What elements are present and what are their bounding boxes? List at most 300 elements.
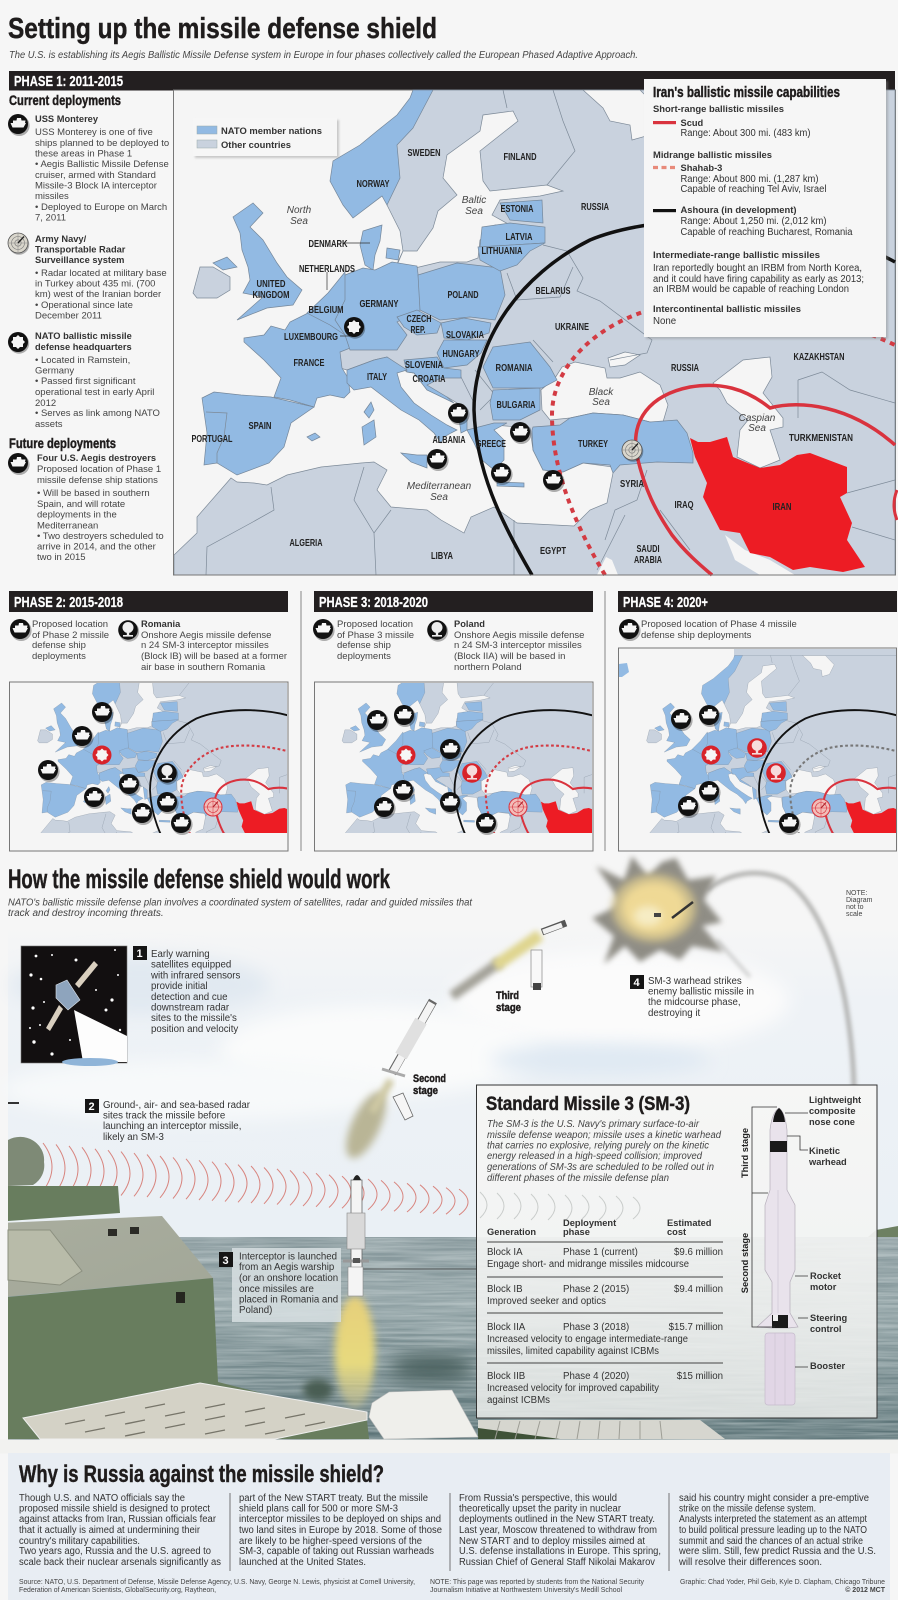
illustration: missile defense scene <box>0 856 898 1454</box>
label: second stage: Second stage <box>740 1233 750 1293</box>
column 2: interceptor missiles to be deployed on ships and <box>239 1514 441 1525</box>
label: second stage: stage <box>413 1085 438 1097</box>
icon: radar <box>8 233 29 255</box>
column 3: From Russia's perspective, this would <box>459 1493 617 1504</box>
panel: why is Russia against <box>8 1453 890 1600</box>
text: Aegis destroyers <box>37 453 164 563</box>
label: third stage: Third stage <box>740 1128 750 1178</box>
country labels: CROATIA <box>412 373 446 385</box>
text: Poland: n 24 SM-3 interceptor missiles <box>454 640 582 651</box>
country labels: BELGIUM <box>308 304 344 316</box>
graphic credit: Graphic: Chad Yoder, Phil Geib, Kyle D. Clapham, Chicago Tribune <box>680 1579 885 1586</box>
subheading: track and destroy incoming threats. <box>8 908 164 919</box>
panel: Iran's missile capabilities: Intermediate-range ballistic missiles <box>653 250 820 260</box>
reporting note: Journalism Initiative at Northwestern University's Medill School <box>430 1587 622 1594</box>
country labels: EGYPT <box>540 545 566 557</box>
sea labels: North <box>287 205 312 216</box>
warship <box>8 1137 725 1439</box>
text: USS Monterey: missiles <box>35 191 69 202</box>
icon: ship <box>8 114 30 136</box>
text: Poland: northern Poland <box>454 662 522 673</box>
part labels: composite <box>809 1106 856 1116</box>
launch plume <box>303 1296 474 1408</box>
legend: Ashoura <box>653 205 853 238</box>
text: USS Monterey: • Aegis Ballistic Missile Defense <box>35 159 169 170</box>
part labels <box>808 1095 861 1371</box>
step 1: with infrared sensors <box>150 970 241 981</box>
text: NATO headquarters: • Located in Ramstein, <box>35 355 130 366</box>
panel: current deployments <box>8 92 169 430</box>
country labels: TURKMENISTAN <box>789 432 853 444</box>
sea labels: Sea <box>592 397 610 408</box>
text: radar system <box>35 234 167 322</box>
column 3: New START and to deploy missiles aimed at <box>459 1536 645 1547</box>
phase 3 header bar: PHASE 3: 2018-2020 <box>319 594 428 611</box>
country labels: BELARUS <box>536 285 570 297</box>
map: phase 3 <box>314 656 623 859</box>
country labels: UNITED <box>256 278 286 290</box>
legend: Scud <box>653 118 810 139</box>
text: Aegis destroyers: arrive in 2014, and the other <box>37 542 156 552</box>
text: Poland <box>454 619 584 673</box>
text: NATO headquarters: Germany <box>35 366 74 376</box>
text: Poland: Poland <box>454 619 485 629</box>
icon: headquarters <box>8 332 29 354</box>
radar waves <box>43 1143 468 1215</box>
text: Romania: (Block IB) will be based at a former <box>141 651 287 662</box>
text: radar system: in Turkey about 435 mi. (700 <box>35 278 155 290</box>
panel: future deployments <box>8 435 164 563</box>
text: Poland: Onshore Aegis missile defense <box>454 630 584 641</box>
text: USS Monterey: USS Monterey <box>35 114 99 124</box>
legend: Shahab-3: Range: About 800 mi. (1,287 km) <box>680 174 818 185</box>
title: Setting up the missile defense shield <box>8 13 437 45</box>
country labels: ESTONIA <box>500 203 534 215</box>
step 3: placed in Romania and <box>239 1295 338 1306</box>
panel: Standard Missile 3 <box>476 1085 877 1418</box>
phase 2 header bar <box>9 591 288 612</box>
country labels: SYRIA <box>620 478 644 490</box>
description: energy released in a high-speed collision; improved <box>487 1151 702 1162</box>
panel: phase 2 <box>9 591 318 859</box>
text: Aegis destroyers: • Two destroyers scheduled to <box>37 531 164 542</box>
icon: onshore missile site <box>427 620 448 642</box>
step 1 <box>133 946 241 1035</box>
sea labels: Sea <box>430 492 448 503</box>
column 2: shield plans call for 500 or more SM-3 <box>239 1504 398 1515</box>
step 1: Early warning <box>151 949 210 960</box>
step 3: once missiles are <box>239 1284 314 1295</box>
sea labels: Mediterranean <box>407 481 472 492</box>
column 1: proposed missile shield is designed to protect <box>19 1504 210 1515</box>
step 3: 3 <box>222 1255 229 1267</box>
part labels: Rocket <box>810 1271 841 1281</box>
column 3: Last year, Moscow threatened to withdraw from <box>459 1525 657 1536</box>
part labels: Lightweight <box>809 1095 861 1105</box>
text: Aegis destroyers: Mediterranean <box>37 520 98 532</box>
text: Aegis destroyers: two in 2015 <box>37 552 86 563</box>
sea labels: Sea <box>465 206 483 217</box>
note: not to scale: scale <box>846 911 862 918</box>
table: generations: $9.6 million <box>674 1247 723 1258</box>
country labels: GERMANY <box>360 298 398 310</box>
text: USS Monterey: • Deployed to Europe on March <box>35 202 167 213</box>
country labels: POLAND <box>448 289 479 301</box>
country labels: ALGERIA <box>290 537 323 549</box>
table: generations: $15.7 million <box>669 1322 723 1333</box>
sea labels: Sea <box>290 216 308 227</box>
country labels: NORWAY <box>356 178 390 190</box>
step 4: enemy ballistic missile in <box>648 987 754 998</box>
label: third stage: stage <box>496 1002 521 1014</box>
text: phase 4 ship note: defense ship deployments <box>641 630 752 641</box>
part labels: warhead <box>808 1157 847 1167</box>
note: not to scale: Diagram <box>846 897 873 904</box>
note: not to scale: NOTE: <box>846 890 867 897</box>
text: NATO headquarters: 2012 <box>35 398 56 409</box>
column 1: Two years ago, Russia and the U.S. agreed to <box>19 1546 211 1557</box>
label: second stage: Second <box>413 1073 446 1085</box>
panel: Iran's missile capabilities: Midrange ballistic missiles <box>653 150 772 160</box>
panel: Iran's missile capabilities: Intercontinental ballistic missiles <box>653 304 801 314</box>
country labels: HUNGARY <box>442 348 480 360</box>
country labels: REP. <box>410 324 426 336</box>
country labels: IRAN <box>772 501 792 513</box>
text: NATO headquarters <box>35 331 160 430</box>
table: generations: Block IIA <box>487 1322 526 1333</box>
second stage rocket <box>338 1001 433 1164</box>
step 3: (or an onshore location <box>239 1273 338 1284</box>
sea labels: Caspian <box>739 413 776 424</box>
column 2: part of the New START treaty. But the missile <box>239 1493 428 1504</box>
map: Europe phase 1 <box>174 90 897 575</box>
phase 1 header bar <box>9 71 895 90</box>
panel: Iran's missile capabilities: and it could have firing capability as early as 2013; <box>653 274 864 285</box>
phase 4 header bar <box>618 591 897 612</box>
part labels: nose cone <box>809 1117 855 1127</box>
column 3: U.S. defense installations in Europe. This spring, <box>459 1546 661 1557</box>
launching interceptor rocket <box>343 1175 369 1296</box>
note: not to scale: not to <box>846 904 864 911</box>
column 3: deployments outlined in the New START treaty. <box>459 1514 655 1525</box>
legend: Ashoura: Capable of reaching Bucharest, Romania <box>680 227 853 238</box>
step 1: provide initial <box>151 981 208 992</box>
phase 4 header bar: PHASE 4: 2020+ <box>623 594 708 611</box>
country labels: GREECE <box>476 438 506 450</box>
step 3: from an Aegis warship <box>239 1262 334 1273</box>
text: phase 2 ship note: Proposed location <box>32 619 108 630</box>
country labels: RUSSIA <box>671 362 699 374</box>
text: phase 4 ship note: Proposed location of Phase 4 missile <box>641 619 797 630</box>
country labels: PORTUGAL <box>192 433 233 445</box>
text: phase 3 ship note: deployments <box>337 651 391 662</box>
text: USS Monterey: Missile-3 Block IA interceptor <box>35 180 157 192</box>
country labels: KINGDOM <box>252 289 290 301</box>
illustration bottom margin <box>0 1440 898 1454</box>
description: generations of SM-3s are scheduled to be rolled out in <box>487 1162 714 1173</box>
diagram: SM-3 missile <box>757 1108 798 1405</box>
text: phase 2 ship note: defense ship <box>32 640 86 651</box>
table: generations: Engage short- and midrange missiles midcourse <box>487 1259 689 1270</box>
panel: Iran's missile capabilities: None <box>653 316 676 327</box>
panel: Iran's missile capabilities: Iran reportedly bought an IRBM from North Korea, <box>653 263 862 274</box>
table: generations: missiles, limited capability against ICBMs <box>487 1346 659 1357</box>
subheading: NATO's ballistic missile defense plan involves a coordinated system of satellites, radar and guided missiles that <box>8 898 473 908</box>
column 1: against attacks from Iran, Russian officials fear <box>19 1514 217 1525</box>
graphic credit <box>680 1579 886 1594</box>
country labels: SPAIN <box>248 420 272 432</box>
label: third stage: Third <box>496 990 519 1002</box>
text: Aegis destroyers: deployments in the <box>37 510 117 520</box>
legend: Other countries <box>221 140 291 150</box>
country labels: ITALY <box>367 371 387 383</box>
heading: Why is Russia against the missile shield? <box>19 1461 384 1488</box>
step 2: Ground-, air- and sea-based radar <box>103 1100 251 1111</box>
step 4: SM-3 warhead strikes <box>648 976 742 987</box>
column 1: that it actually is aimed at undermining their <box>19 1525 201 1536</box>
column 4: strike on the missile defense system. <box>679 1504 816 1515</box>
step 1: position and velocity <box>151 1024 238 1035</box>
column 3: Russian Chief of General Staff Nikolai Makarov <box>459 1557 655 1568</box>
text: USS Monterey: ships planned to be deployed to <box>35 138 169 149</box>
text: radar system: • Operational since late <box>35 300 133 311</box>
text: NATO headquarters: assets <box>35 419 63 430</box>
column 4: summit and said the chances of an actual strike <box>679 1536 863 1547</box>
table: generations: Deployment <box>563 1218 616 1228</box>
legend: Shahab-3 <box>653 163 826 195</box>
third stage rocket <box>452 923 566 996</box>
table: generations: Phase 4 (2020) <box>563 1371 629 1382</box>
description: missile defense weapon; missile uses a kinetic warhead <box>487 1130 721 1141</box>
text: Romania: air base in southern Romania <box>141 662 266 673</box>
sea labels <box>287 195 776 503</box>
column 4: will resolve their differences soon. <box>678 1557 822 1568</box>
step 3: Poland) <box>239 1305 272 1316</box>
map: phase 2 <box>10 656 318 859</box>
text: Poland: (Block IIA) will be based in <box>454 651 565 662</box>
country labels: SLOVAKIA <box>446 329 484 341</box>
text: NATO headquarters: operational test in early April <box>35 387 154 398</box>
faint radar waves <box>480 1192 640 1221</box>
step 1: 1 <box>136 948 143 960</box>
text: radar system: December 2011 <box>35 310 102 322</box>
phase 3 header bar <box>314 591 593 612</box>
table: generations: Increased velocity for improved capability <box>487 1383 659 1394</box>
step 4: destroying it <box>648 1008 701 1019</box>
table: generations: Phase 1 (current) <box>563 1247 638 1258</box>
enemy missile trail <box>707 873 854 1095</box>
description: different phases of the missile defense plan <box>487 1173 669 1184</box>
column 2: SM-3, capable of taking out Russian warheads <box>239 1546 434 1557</box>
country labels: TURKEY <box>578 438 608 450</box>
table: generations: Increased velocity to engage intermediate-range <box>487 1334 688 1345</box>
country labels: CZECH <box>406 313 432 325</box>
icon: ship <box>8 453 30 475</box>
step 2: sites track the missile before <box>103 1111 225 1122</box>
explosion <box>592 856 724 964</box>
heading: future deployments: Future deployments <box>9 435 116 451</box>
country labels: BULGARIA <box>496 399 536 411</box>
panel: Iran's missile capabilities: Short-range ballistic missiles <box>653 104 784 114</box>
text: radar system: Surveillance system <box>35 255 124 265</box>
step 4 <box>630 975 754 1019</box>
table: generations: against ICBMs <box>487 1395 550 1406</box>
text: phase 3 ship note: Proposed location <box>337 619 413 630</box>
inset: satellite <box>21 946 127 1066</box>
step 2: launching an interceptor missile, <box>103 1121 241 1132</box>
source credit: Source: NATO, U.S. Department of Defense, Missile Defense Agency, U.S. Navy, George N. Lewis, physicist at Cornell University, <box>19 1579 415 1586</box>
country labels: UKRAINE <box>555 321 589 333</box>
country labels: LIBYA <box>431 550 453 562</box>
heading: current deployments: Current deployments <box>9 92 121 108</box>
column 1: scale back their nuclear arsenals significantly as <box>19 1557 221 1568</box>
legend: Shahab-3: Capable of reaching Tel Aviv, Israel <box>680 184 826 195</box>
step 4: 4 <box>634 977 640 989</box>
table: generations: cost <box>667 1227 686 1237</box>
table: generations: Block IA <box>487 1247 523 1258</box>
part labels: Booster <box>810 1361 846 1371</box>
map markers <box>344 317 643 492</box>
step 2 <box>85 1099 251 1143</box>
text: Romania: Romania <box>141 619 181 629</box>
leaders <box>785 1113 808 1367</box>
country labels: LUXEMBOURG <box>284 331 338 343</box>
text: radar system: Army Navy/ <box>35 234 87 244</box>
sea labels: Sea <box>748 423 766 434</box>
source credit: Federation of American Scientists, GlobalSecurity.org, Raytheon, <box>19 1587 216 1594</box>
step 1: satellites equipped <box>151 960 231 971</box>
column 2: two land sites in Europe by 2018. Some of those <box>239 1525 442 1536</box>
text: phase 2 ship note: of Phase 2 missile <box>32 630 109 641</box>
icon: onshore missile site <box>118 620 139 642</box>
text: Romania: Onshore Aegis missile defense <box>141 630 271 641</box>
graphic credit: © 2012 MCT <box>845 1586 886 1594</box>
legend: NATO member nations <box>221 126 322 136</box>
column 4: were slim. Still, few predict Russia and the U.S. <box>678 1546 876 1557</box>
country labels: SWEDEN <box>408 147 440 159</box>
brackets: stages <box>752 1107 777 1327</box>
country labels: RUSSIA <box>581 201 609 213</box>
table: generations: Phase 2 (2015) <box>563 1284 629 1295</box>
country labels: ALBANIA <box>432 434 466 446</box>
legend: Ashoura: Ashoura (in development) <box>680 205 796 215</box>
country labels: KAZAKHSTAN <box>794 351 844 363</box>
part labels: Steering <box>810 1313 848 1323</box>
panel: Iran's missile capabilities: an IRBM would be capable of reaching London <box>653 284 849 295</box>
country labels: IRAQ <box>674 499 694 511</box>
country labels: ARABIA <box>634 554 662 566</box>
reporting note: NOTE: This page was reported by students from the National Security <box>430 1579 644 1586</box>
column 1: country's military capabilities. <box>19 1536 140 1547</box>
country labels: FRANCE <box>294 357 324 369</box>
text: USS Monterey: USS Monterey is one of five <box>35 127 153 138</box>
legend <box>193 118 339 158</box>
table: generations: $9.4 million <box>674 1284 723 1295</box>
legend: Ashoura: Range: About 1,250 mi. (2,012 km) <box>680 216 826 227</box>
country labels: SAUDI <box>636 543 660 555</box>
text: USS Monterey <box>35 114 169 224</box>
text: NATO headquarters: defense headquarters <box>35 342 132 352</box>
map: phase 4 <box>618 648 898 859</box>
country labels: FINLAND <box>504 151 537 163</box>
panel: phase 1 <box>8 71 897 575</box>
table: generations: phase <box>563 1227 590 1237</box>
heading: how the shield works: How the missile defense shield would work <box>8 864 391 894</box>
country labels: LITHUANIA <box>482 245 523 257</box>
subtitle: The U.S. is establishing its Aegis Ballistic Missile Defense system in Europe in four phases collectively called the European Phased Adaptive Approach. <box>9 50 638 61</box>
legend: Shahab-3: Shahab-3 <box>680 163 722 173</box>
panel: Iran's missile capabilities <box>644 79 888 339</box>
column 2: are likely to be higher-speed versions of the <box>239 1536 422 1547</box>
column 3: theoretically upset the parity in nuclear <box>459 1504 622 1515</box>
panel: Iran's missile capabilities: Iran's ballistic missile capabilities <box>653 84 840 101</box>
text: Aegis destroyers: Proposed location of Phase 1 <box>37 464 161 475</box>
part labels: motor <box>810 1282 837 1292</box>
text: Aegis destroyers: • Will be based in southern <box>37 488 150 499</box>
step 3: Interceptor is launched <box>239 1252 337 1263</box>
table: generations: Block IB <box>487 1284 523 1295</box>
text: Romania <box>141 619 287 673</box>
step 2: 2 <box>88 1101 95 1113</box>
part labels: control <box>810 1324 842 1334</box>
column 2: launched at the United States. <box>239 1557 366 1568</box>
text: phase 3 ship note: defense ship <box>337 640 391 651</box>
description: that carries no explosive, relying purely on the kinetic <box>487 1141 709 1152</box>
column 4: to build political pressure leading up to the NATO <box>679 1525 867 1536</box>
text: USS Monterey: these areas in Phase 1 <box>35 148 132 160</box>
icon: ship <box>10 619 32 641</box>
country labels: SLOVENIA <box>405 359 443 371</box>
sea labels: Baltic <box>462 195 486 206</box>
text: NATO headquarters: • Passed first significant <box>35 376 136 387</box>
text: phase 3 ship note: of Phase 3 missile <box>337 630 414 641</box>
text: NATO headquarters: NATO ballistic missile <box>35 331 132 341</box>
phase 1 header bar: PHASE 1: 2011-2015 <box>14 73 123 90</box>
table: generations: Block IIB <box>487 1371 525 1382</box>
country labels: ROMANIA <box>496 362 533 374</box>
country labels: DENMARK <box>308 238 348 250</box>
country labels: NETHERLANDS <box>299 263 355 275</box>
panel: phase 4 <box>618 591 898 859</box>
text: USS Monterey: cruiser, armed with Standard <box>35 170 156 181</box>
table: generations: Improved seeker and optics <box>487 1296 606 1307</box>
step 4: the midcourse phase, <box>648 997 741 1008</box>
text: Aegis destroyers: Spain, and will rotate <box>37 499 125 510</box>
text: Aegis destroyers: missile defense ship stations <box>37 475 158 486</box>
text: phase 2 ship note: deployments <box>32 651 86 662</box>
legend: Scud: Scud <box>680 118 704 128</box>
text: USS Monterey: 7, 2011 <box>35 212 66 224</box>
step 1: sites to the missile's <box>151 1013 237 1024</box>
text: radar system: Transportable Radar <box>35 245 126 255</box>
step 1: downstream radar <box>151 1002 230 1014</box>
description: The SM-3 is the U.S. Navy's primary surface-to-air <box>487 1119 700 1130</box>
heading: Standard Missile 3 (SM-3) <box>486 1094 690 1115</box>
legend: Scud: Range: About 300 mi. (483 km) <box>680 128 810 139</box>
table: generations <box>487 1218 723 1406</box>
panel: phase 3 <box>313 591 623 859</box>
country labels <box>192 147 853 566</box>
step 2: likely an SM-3 <box>103 1132 164 1143</box>
text: NATO headquarters: • Serves as link among NATO <box>35 408 160 419</box>
column 4: said his country might consider a pre-emptive <box>679 1493 869 1504</box>
part labels: Kinetic <box>809 1146 840 1156</box>
text: Romania: n 24 SM-3 interceptor missiles <box>141 640 269 651</box>
phase 2 header bar: PHASE 2: 2015-2018 <box>14 594 123 611</box>
text: radar system: • Radar located at military base <box>35 268 167 279</box>
step 1: detection and cue <box>151 992 227 1003</box>
column 1: Though U.S. and NATO officials say the <box>19 1493 185 1504</box>
